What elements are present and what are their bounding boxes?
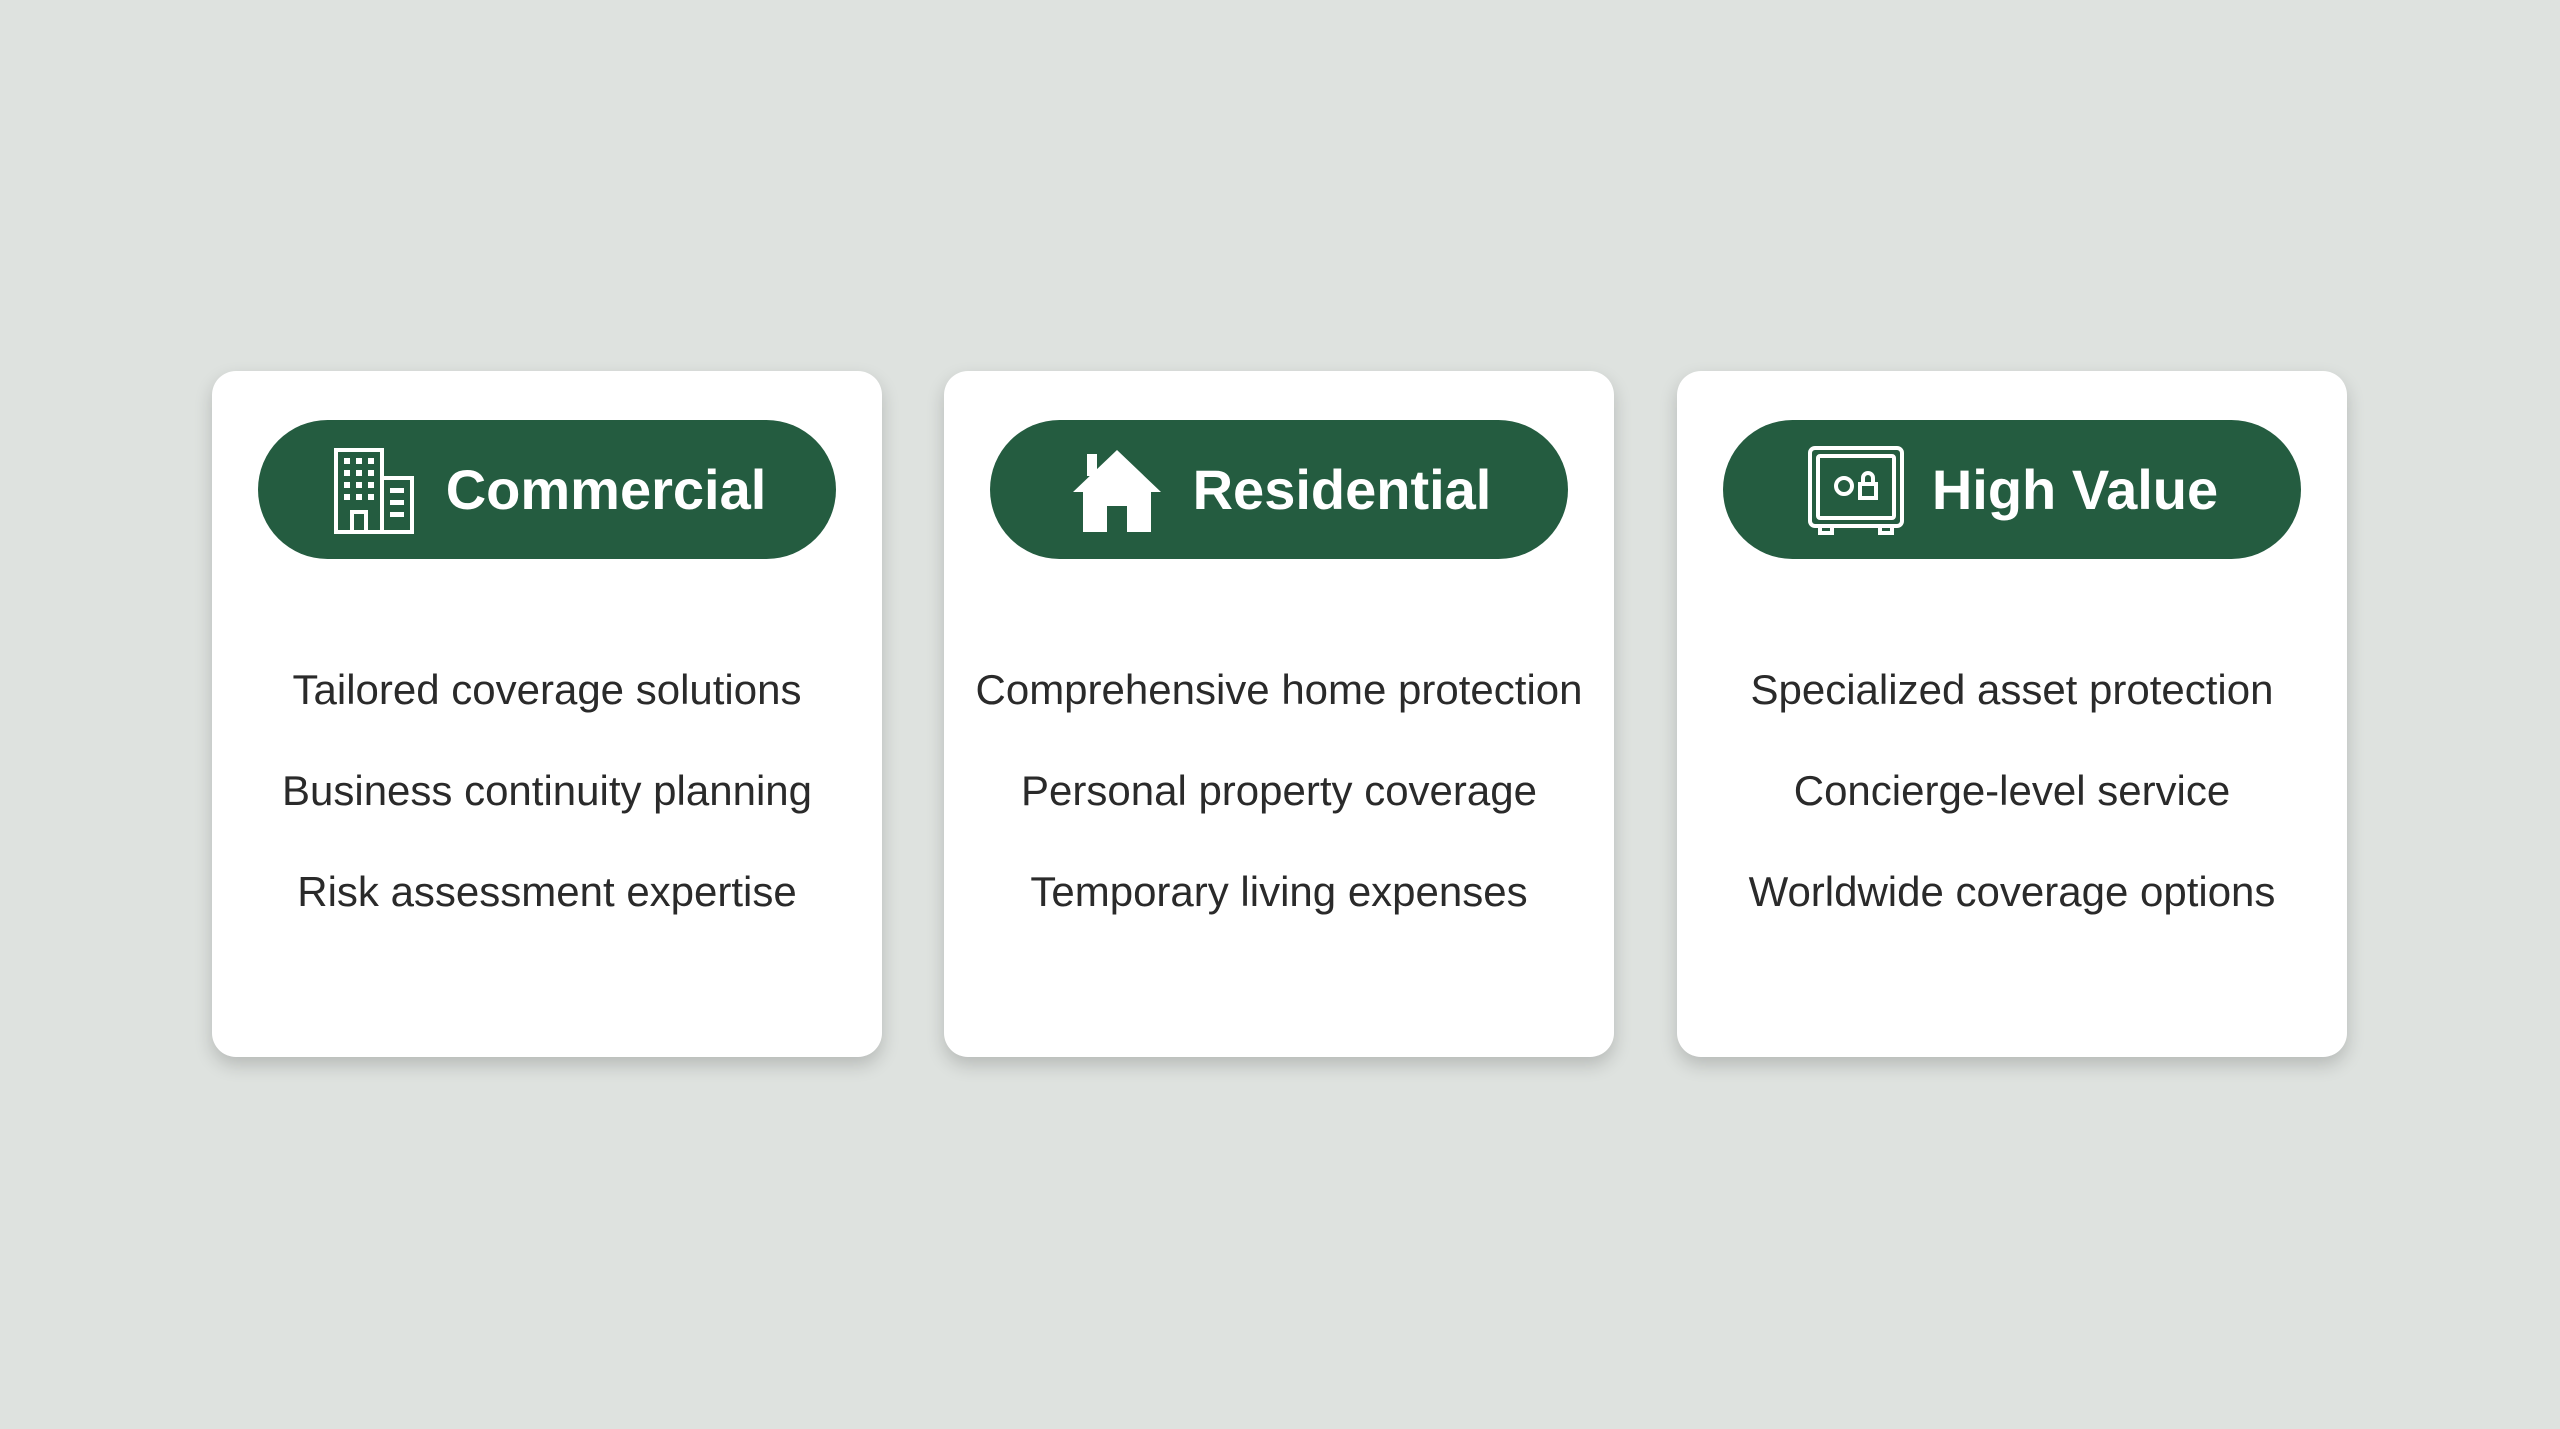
text: commercial features: Business continuity planning — [282, 767, 812, 814]
panel: commercial — [212, 371, 882, 1057]
text: residential features: Personal property coverage — [1021, 767, 1537, 814]
text: residential features: Comprehensive home protection — [976, 666, 1582, 713]
text: residential features — [976, 666, 1582, 915]
text: residential features: Temporary living expenses — [1030, 868, 1528, 915]
text: high value features: Specialized asset protection — [1750, 666, 2273, 713]
icon: building — [334, 448, 414, 534]
icon: safe — [1808, 446, 1904, 535]
text: high value features — [1748, 666, 2275, 915]
text: high value features: Worldwide coverage options — [1749, 868, 2275, 915]
heading: commercial: Commercial — [446, 458, 766, 521]
heading: high value — [1723, 420, 2301, 559]
text: commercial features: Tailored coverage solutions — [293, 666, 801, 713]
panel: residential — [944, 371, 1614, 1057]
heading: residential: Residential — [1193, 458, 1491, 521]
text: high value features: Concierge-level service — [1794, 767, 2230, 814]
heading: high value: High Value — [1932, 458, 2218, 521]
icon: house — [1073, 450, 1161, 532]
text: commercial features: Risk assessment expertise — [297, 868, 797, 915]
text: commercial features — [282, 666, 812, 915]
heading: residential — [990, 420, 1568, 559]
heading: commercial — [258, 420, 836, 559]
panel: high value — [1677, 371, 2347, 1057]
